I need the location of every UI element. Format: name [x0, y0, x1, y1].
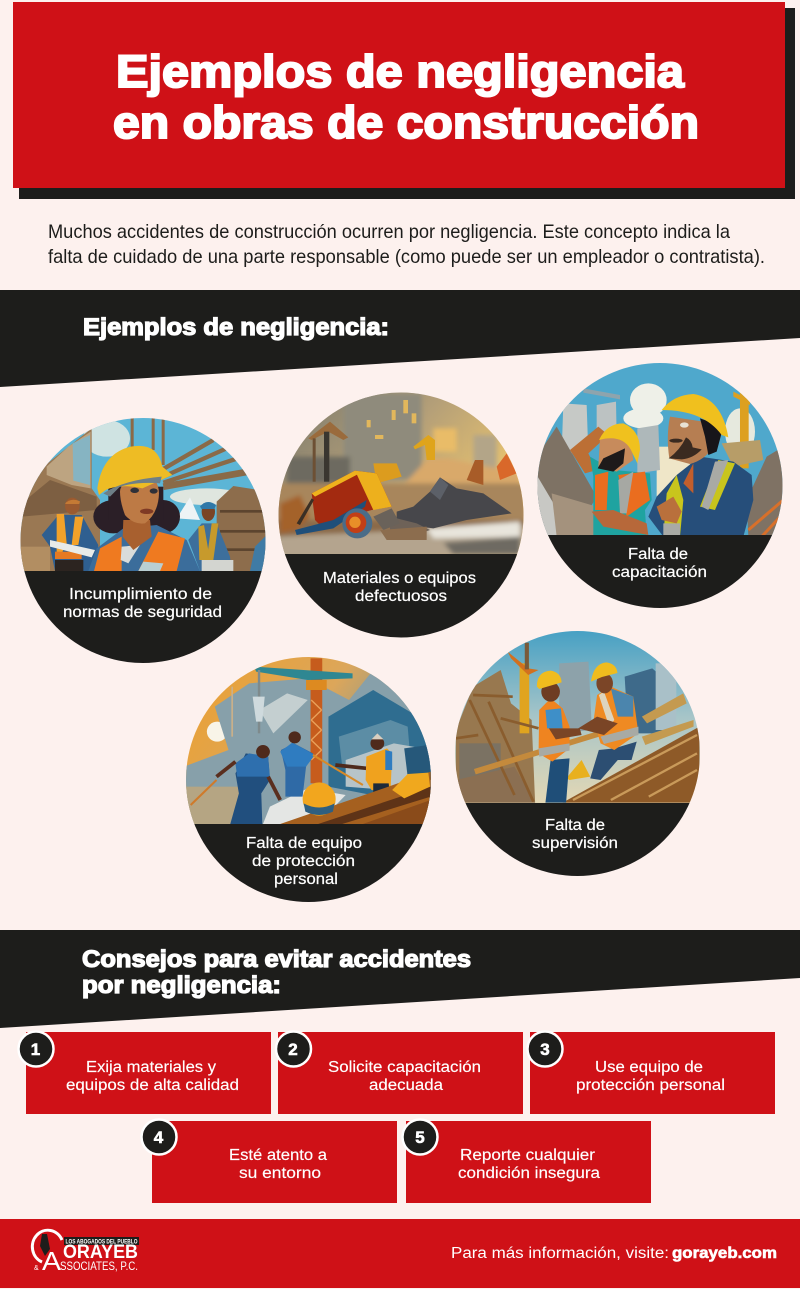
illustration: two workers handshake [455, 631, 700, 876]
tip card 3: 3 [540, 1040, 550, 1059]
label: defectuosos [355, 588, 447, 605]
footer [0, 1219, 800, 1288]
label: Falta de equipo [246, 835, 362, 852]
tip card 2: adecuada [369, 1077, 443, 1094]
panel: falta de supervision [455, 631, 700, 876]
intro paragraph [48, 221, 765, 268]
logo: & [34, 1265, 39, 1272]
tip card 5: Reporte cualquier [460, 1147, 595, 1164]
label: supervisión [532, 835, 618, 852]
tip card 2 [276, 1032, 523, 1114]
footer call to action: gorayeb.com [672, 1245, 777, 1262]
section heading: Ejemplos de negligencia: [83, 314, 389, 341]
panel: falta de capacitacion [530, 360, 790, 615]
section heading: por negligencia: [82, 972, 281, 999]
label [246, 835, 362, 888]
intro paragraph: falta de cuidado de una parte responsable (como puede ser un empleador o contratista). [48, 246, 765, 268]
logo [32, 1230, 139, 1276]
label: Falta de [628, 546, 688, 563]
title [113, 46, 699, 148]
label: de protección [252, 853, 355, 870]
section heading [82, 946, 471, 999]
panel: incumplimiento de normas [20, 418, 266, 663]
tip card 1: Exija materiales y [86, 1059, 216, 1076]
tip card 3: protección personal [576, 1077, 725, 1094]
label: capacitación [612, 564, 707, 581]
title: Ejemplos de negligencia [116, 46, 685, 97]
label: Incumplimiento de [69, 586, 212, 603]
tip card 4: 4 [154, 1128, 164, 1147]
tip card 2: 2 [288, 1040, 298, 1059]
tip card 3 [528, 1032, 775, 1114]
tip card 4 [142, 1120, 397, 1203]
tip card 2: Solicite capacitación [328, 1059, 481, 1076]
tip card 5 [402, 1120, 651, 1203]
label: normas de seguridad [63, 604, 222, 621]
illustration: workers and crane [186, 657, 431, 902]
intro paragraph: Muchos accidentes de construcción ocurren por negligencia. Este concepto indica la [48, 221, 730, 243]
illustration: woman worker [20, 418, 266, 663]
section band: ejemplos [0, 290, 800, 387]
illustration: overturned cart [278, 392, 524, 638]
title banner [13, 2, 795, 199]
panel: falta de equipo de proteccion [186, 657, 431, 902]
logo: ORAYEB [63, 1242, 138, 1263]
tip card 1: 1 [31, 1040, 40, 1059]
section band: consejos [0, 930, 800, 1028]
illustration: two workers looking up [530, 360, 790, 615]
title: en obras de construcción [113, 97, 699, 148]
tip card 1: equipos de alta calidad [66, 1077, 239, 1094]
label [63, 586, 222, 621]
logo: SSOCIATES, P.C. [60, 1259, 138, 1273]
logo: LOS ABOGADOS DEL PUEBLO [66, 1240, 138, 1246]
label [612, 546, 707, 581]
label [532, 817, 618, 852]
tip card 4: Esté atento a [229, 1147, 327, 1164]
tip card 1 [18, 1032, 271, 1114]
section heading: Consejos para evitar accidentes [82, 946, 471, 973]
label: Materiales o equipos [323, 570, 476, 587]
label [323, 570, 476, 605]
footer call to action [451, 1245, 777, 1262]
logo: A [42, 1246, 62, 1276]
label: personal [274, 871, 338, 888]
tip card 5: condición insegura [458, 1165, 600, 1182]
label: Falta de [545, 817, 605, 834]
tip card 3: Use equipo de [595, 1059, 703, 1076]
footer call to action: Para más información, visite: [451, 1245, 669, 1262]
panel: materiales defectuosos [278, 392, 524, 638]
tip card 5: 5 [415, 1128, 425, 1147]
tip card 4: su entorno [239, 1165, 321, 1182]
